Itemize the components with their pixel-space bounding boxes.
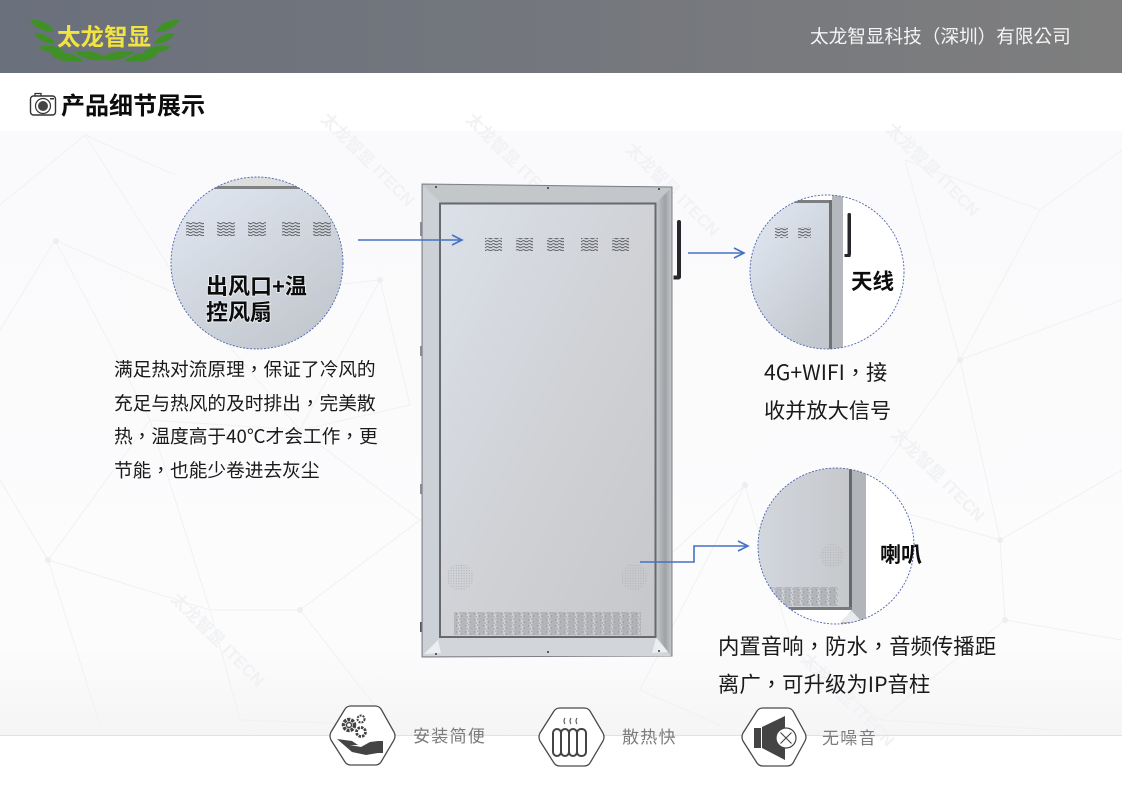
page background band: 太龙智显 ITECN (167, 589, 269, 690)
logo: wreath with company name: 太龙智显 (57, 24, 151, 50)
icon: heat radiator (539, 708, 604, 766)
description: antenna: 收并放大信号 (764, 394, 891, 425)
vent slots: top row (485, 238, 629, 251)
feature: noiseless (742, 708, 877, 766)
page background band: 太龙智显 ITECN (317, 109, 419, 210)
description: antenna (764, 356, 891, 425)
description: air outlet: 热，温度高于40℃才会工作，更 (114, 422, 378, 449)
product: display panel rear view (420, 184, 681, 657)
description: speaker (718, 630, 996, 699)
bottom vent grille (454, 612, 641, 635)
zoom circle: antenna (750, 195, 904, 349)
label: air outlet and fan: 控风扇 (206, 300, 272, 325)
arrow: speaker (640, 541, 748, 562)
icon: camera (30, 94, 56, 115)
arrow: antenna (688, 248, 744, 258)
label: air outlet and fan: 出风口+温 (206, 274, 307, 299)
description: antenna: 4G+WIFI，接 (764, 356, 887, 387)
icon: gears and hand (330, 706, 395, 765)
description: air outlet: 充足与热风的及时排出，完美散 (114, 389, 376, 416)
antenna (674, 220, 681, 280)
icon: muted speaker (742, 708, 806, 766)
callout: antenna (750, 195, 904, 349)
page background band: 太龙智显 ITECN (887, 424, 989, 525)
page background band: 太龙智显 ITECN (882, 119, 984, 220)
feature: fast heat dissipation: 散热快 (622, 728, 677, 747)
description: speaker: 内置音响，防水，音频传播距 (718, 630, 996, 661)
feature: noiseless: 无噪音 (822, 729, 877, 748)
feature: fast heat dissipation (539, 708, 677, 766)
page background band: 太龙智显 ITECN (462, 109, 564, 210)
callout: speaker (758, 468, 922, 624)
label: air outlet and fan (206, 274, 307, 325)
callout: air outlet (171, 177, 343, 349)
company name: 太龙智显科技（深圳）有限公司 (810, 22, 1071, 49)
label: antenna: 天线 (851, 270, 894, 294)
description: air outlet: 满足热对流原理，保证了冷风的 (114, 355, 376, 382)
label: speaker: 喇叭 (880, 544, 922, 567)
page background band: 太龙智显 ITECN (622, 139, 724, 240)
arrow: air outlet (358, 235, 462, 245)
feature: easy installation (330, 706, 486, 765)
zoom circle: speaker (758, 468, 914, 624)
logo: wreath with company name (30, 20, 180, 62)
zoom circle: air outlet (171, 177, 343, 349)
section heading: 产品细节展示 (61, 93, 205, 120)
speaker grilles (446, 564, 648, 590)
page background band: 太龙智显 ITECN (797, 649, 899, 750)
description: air outlet (114, 355, 378, 483)
description: speaker: 离广，可升级为IP音柱 (718, 668, 930, 699)
header bar (0, 0, 1122, 73)
feature: easy installation: 安装简便 (413, 727, 486, 746)
description: air outlet: 节能，也能少卷进去灰尘 (114, 456, 320, 483)
